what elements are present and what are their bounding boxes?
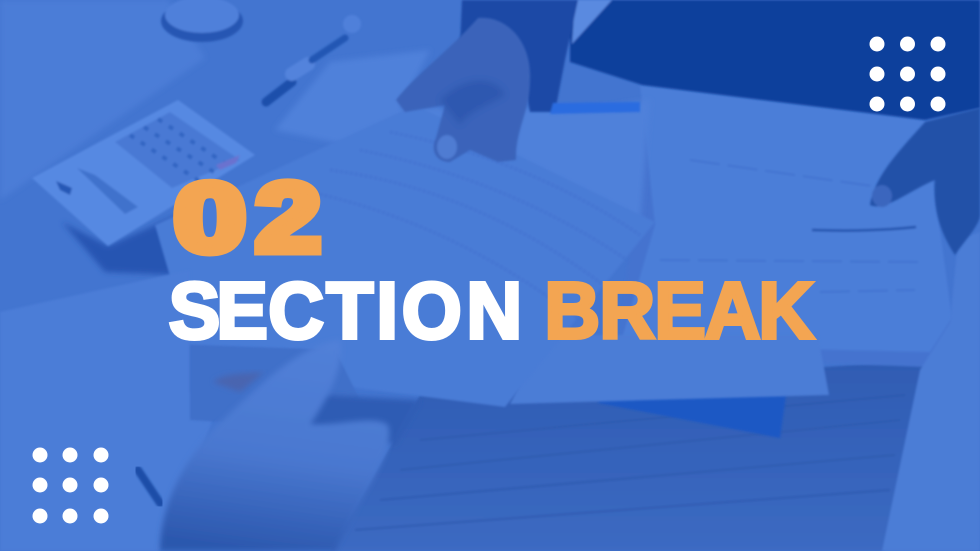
heading: section break [169, 266, 814, 355]
dark suit top right [460, 0, 980, 120]
right bottom paper [882, 232, 980, 551]
section number: 2 [256, 164, 321, 272]
calculator shadow [62, 205, 200, 275]
dots: top right [870, 36, 946, 112]
top left paper [0, 0, 205, 200]
wooden desk [330, 360, 925, 551]
top middle document [275, 50, 650, 225]
center document [155, 105, 655, 407]
magnifier [161, 0, 243, 42]
right stack of documents [620, 85, 952, 368]
top hand [396, 18, 530, 162]
knuckle [213, 372, 264, 392]
pen on desk [266, 15, 361, 102]
heading word: break: BREAK [545, 266, 814, 355]
calculator [32, 100, 255, 246]
bottom left document [0, 270, 212, 551]
paper stack beside hand [190, 345, 360, 425]
section number: 0 [174, 164, 246, 272]
section number [174, 164, 321, 272]
dark gap between fingers [295, 395, 420, 445]
foreground hand [160, 340, 420, 551]
dots: bottom left [32, 448, 108, 524]
lower document [510, 335, 829, 404]
heading word: section: SECTION [169, 266, 522, 355]
right hand [870, 108, 980, 255]
blue folder [598, 380, 786, 438]
black pen bottom left [138, 470, 160, 503]
